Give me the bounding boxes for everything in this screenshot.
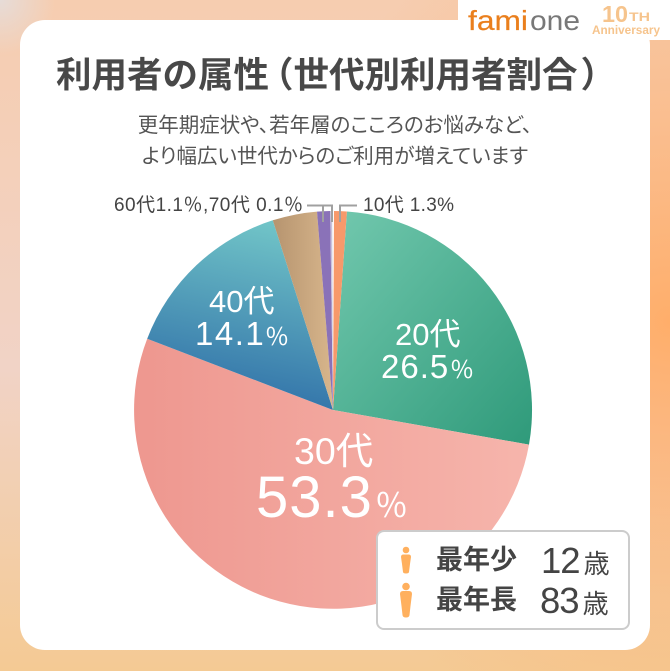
label: youngest: 最年少 [436,545,517,575]
logo wordmark: one [530,5,580,36]
age box [376,530,630,630]
subtitle: 更年期症状や、若年層のこころのお悩みなど、 [138,114,532,137]
slice: 20s [333,212,532,445]
label: oldest: 最年長 [436,585,517,615]
label: 60s and 70s: 60代1.1％,70代 0.1％ [114,194,303,216]
label: 30s: 30代 [294,430,373,472]
anniversary mark: TH [629,10,650,24]
slice: 70s [330,211,333,410]
label: 20s: ％ [450,357,474,384]
leader lines [307,206,357,222]
logo panel [458,0,670,40]
label: 40s: ％ [265,324,289,351]
label: 30s [256,430,408,530]
label: 40s: 14.1 [195,315,265,352]
label: 20s [381,317,474,385]
label: 20s: 26.5 [381,348,449,385]
subtitle: より幅広い世代からのご利用が増えています [142,145,528,168]
icon: oldest person [400,582,412,618]
title: 利用者の属性（世代別利用者割合） [56,55,616,95]
icon: youngest person [401,546,411,574]
slice: 10s [333,211,347,410]
label: 30s: 53.3 [256,465,373,530]
anniversary mark [592,1,661,37]
slice: 40s [147,220,333,410]
label: 40s: 40代 [209,284,274,319]
label: 10s: 10代 1.3% [363,194,454,216]
label: 20s: 20代 [395,317,460,352]
label: 30s: ％ [375,487,408,524]
anniversary mark: Anniversary [592,25,661,37]
slice: 50s [273,212,333,410]
slice: 60s [317,211,333,410]
logo wordmark [468,5,580,36]
value: oldest: 83歳 [540,580,608,621]
slice: 30s [134,339,529,609]
logo wordmark: fami [468,5,528,36]
subtitle [138,114,532,168]
label: 40s [195,284,289,352]
value: youngest: 12歳 [541,540,609,581]
anniversary mark: 10 [602,1,628,27]
